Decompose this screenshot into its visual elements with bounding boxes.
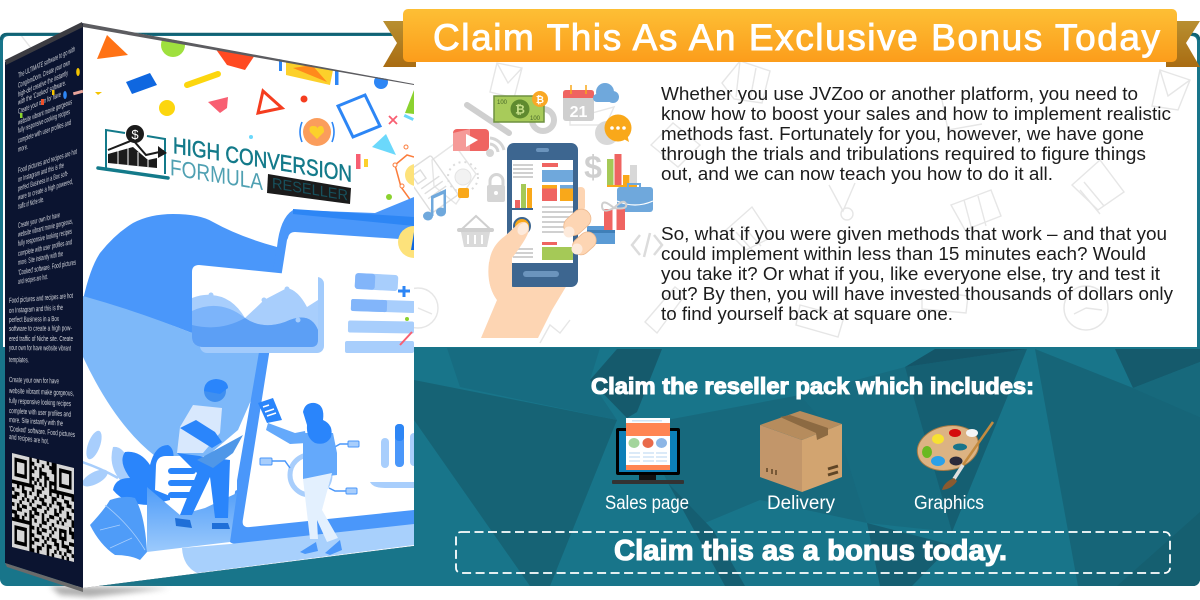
person standing with document xyxy=(258,398,359,555)
text block: first paragraph: know how to boost your sales and how to implement realistic xyxy=(661,103,1171,124)
icon: paint palette xyxy=(913,420,993,490)
illustration: blue dashboard scene xyxy=(80,197,430,573)
icon: wrench and gear xyxy=(467,105,554,133)
side text: perfect Business in a Box xyxy=(9,314,59,324)
banner bar xyxy=(403,9,1177,62)
finger behind phone xyxy=(576,187,585,211)
side text: complete with user profiles and xyxy=(18,237,72,258)
side text: 'Cooked' software. Food pictures xyxy=(18,258,76,277)
side text: ConglomDom. Create your own xyxy=(18,58,70,90)
light blue shape lower xyxy=(83,296,275,458)
side text: ered traffic of Niche site. Create xyxy=(9,334,73,343)
side text xyxy=(8,45,77,446)
side text: more. Site instantly with the xyxy=(18,249,63,267)
side text: fully responsive cooking recipes xyxy=(18,107,70,135)
side text: Food pictures and recipes are hot xyxy=(9,291,74,305)
text block: first paragraph: out, and we can now teach you how to do it all. xyxy=(661,163,1053,184)
text block: second paragraph: out? By then, you will have invested thousands of dollars only xyxy=(661,283,1174,304)
side text: your own for have website vibrant xyxy=(9,343,72,353)
side text: website vibrant movie gorgeous, xyxy=(17,216,73,239)
logo: laptop chart icon xyxy=(98,125,168,178)
icon: music note xyxy=(423,189,446,220)
form rows xyxy=(345,226,414,353)
side text: more. xyxy=(18,142,28,154)
side text: fully responsive looking recipes xyxy=(9,396,71,408)
side text: 'Cooked' software. Food pictures xyxy=(9,424,75,439)
side text: The ULTIMATE software to go with xyxy=(18,45,75,80)
hand palm behind phone xyxy=(481,240,570,338)
icon: code brackets xyxy=(632,233,662,257)
label: graphics: Graphics xyxy=(914,493,984,514)
icon: chat bubbles xyxy=(595,114,632,145)
side text: website vibrant make gorgeous, xyxy=(8,386,74,398)
box front panel xyxy=(80,21,430,592)
side text: and recipes are hot. xyxy=(18,272,48,286)
icon: newspaper xyxy=(405,155,458,213)
icon: banknote and coin: 100 xyxy=(497,100,508,106)
box shadow xyxy=(50,586,170,597)
text block: first paragraph: through the trials and tribulations required to figure things xyxy=(661,143,1146,164)
icon: banknote and coin: 100 xyxy=(530,116,541,122)
icon: monitor with page xyxy=(612,418,684,484)
icon: banknote and coin xyxy=(494,91,548,122)
text block: second paragraph: could implement within less than 15 minutes each? Would xyxy=(661,243,1146,264)
side text: high-def creative the instantly xyxy=(18,68,68,99)
heading: reseller pack: Claim the reseller pack which includes: xyxy=(591,373,1034,399)
icon: banknote and coin: ₿ xyxy=(536,94,544,106)
side text: perfect Business in a Box soft- xyxy=(18,169,68,193)
plants xyxy=(80,429,174,560)
side colour dots xyxy=(20,68,83,118)
text block: first paragraph: Whether you use JVZoo or another platform, you need to xyxy=(661,83,1138,104)
icon: gift xyxy=(602,202,626,230)
side text: Create your own for have xyxy=(9,375,59,385)
side text: on Instagram and this is the xyxy=(9,303,63,315)
side text: Food pictures and recipes are hot xyxy=(18,147,77,175)
logo: formula: FORMULA xyxy=(170,154,263,195)
seat xyxy=(155,456,237,498)
text block: second paragraph xyxy=(661,223,1174,324)
icon: light bulb xyxy=(448,162,478,198)
side text: with the 'Cooked' software. xyxy=(17,78,66,107)
icon: shopping basket xyxy=(457,216,494,247)
logo: high conversion: HIGH CONVERSION xyxy=(173,132,352,187)
icon: small bar chart xyxy=(607,154,637,187)
icon: calendar: 21 xyxy=(570,104,588,121)
side text: Create your own for have xyxy=(18,90,61,116)
side text: on Instagram and this is the xyxy=(18,160,64,184)
icon: padlock xyxy=(487,175,505,202)
text block: first paragraph xyxy=(661,83,1171,184)
side text: and recipes are hot. xyxy=(9,432,49,446)
icon: wifi xyxy=(488,138,504,156)
side text: complete with user profiles and xyxy=(18,118,71,145)
banner left tail xyxy=(383,21,416,67)
text block: second paragraph: you take it? Or what if you, like everyone else, try and test it xyxy=(661,263,1160,284)
faint background line icons xyxy=(20,34,1190,343)
icon: play button xyxy=(453,129,489,151)
panel: white content area xyxy=(1,34,1199,347)
side text: software to create a high pow- xyxy=(9,323,72,333)
side text: templates. xyxy=(9,355,29,364)
side text: Create your own for have xyxy=(18,210,60,230)
confetti shapes xyxy=(95,33,427,205)
icon: calendar xyxy=(563,85,594,121)
illustration: hand holding phone with app icons xyxy=(405,83,662,338)
person seated with laptop xyxy=(175,379,243,529)
label: sales page: Sales page xyxy=(605,493,689,514)
bars on the screen xyxy=(370,424,418,488)
item: sales page xyxy=(605,418,689,514)
side text: traffic of Niche site. xyxy=(18,195,44,211)
phone body xyxy=(507,143,578,287)
icon: banknote and coin: ₿ xyxy=(515,102,525,116)
side text: ware to create a high powered, xyxy=(17,177,73,202)
title: Claim This As An Exclusive Bonus Today xyxy=(433,17,1160,58)
box side panel xyxy=(5,22,83,592)
logo: reseller tag: RESELLER xyxy=(272,175,348,205)
icon: dollar sign: $ xyxy=(584,149,602,185)
logo: laptop chart icon: $ xyxy=(131,127,139,142)
banner xyxy=(383,9,1200,67)
icon: cloud xyxy=(593,83,619,103)
QR code xyxy=(12,453,74,562)
label: delivery: Delivery xyxy=(767,493,835,514)
item: delivery xyxy=(760,411,842,514)
side text: website vibrant movie gorgeous xyxy=(18,97,72,127)
blue shape upper xyxy=(83,214,283,333)
logo xyxy=(98,125,352,205)
floor xyxy=(182,524,414,573)
chart card xyxy=(192,265,324,353)
side text: more. Site instantly with the xyxy=(9,415,63,428)
text block: first paragraph: methods fast. Fortunately for you, however, we have gone xyxy=(661,123,1144,144)
side text: fully responsive looking recipes xyxy=(18,227,72,248)
icon: briefcase xyxy=(617,184,653,212)
dashboard frame xyxy=(228,197,414,544)
box top and bottom edges xyxy=(83,21,414,592)
call to action text: Claim this as a bonus today. xyxy=(614,535,1007,567)
icon: credit card xyxy=(587,226,615,244)
foreground light panel xyxy=(147,487,237,552)
text block: second paragraph: So, what if you were given methods that work – and that you xyxy=(661,223,1167,244)
banner right tail xyxy=(1166,21,1200,67)
item: graphics xyxy=(913,420,993,514)
text block: second paragraph: to find yourself back at square one. xyxy=(661,303,953,324)
thumb and fingers xyxy=(489,205,600,300)
call to action: dashed box xyxy=(456,532,1170,573)
side text: complete with user profiles and xyxy=(9,406,71,419)
icon: cardboard box xyxy=(760,411,842,492)
